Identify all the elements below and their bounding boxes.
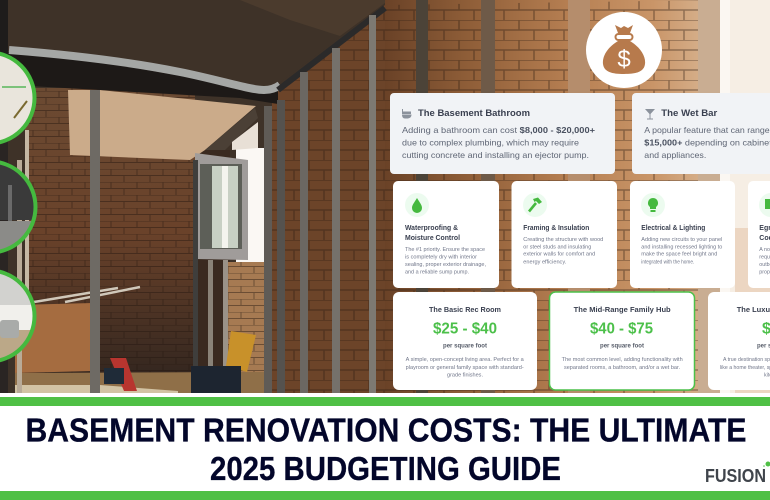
window opening and frame bbox=[195, 108, 272, 262]
heading: electrical and lighting: Electrical & Lighting bbox=[641, 225, 705, 232]
heading: framing and insulation: Framing & Insulation bbox=[523, 225, 589, 232]
title bbox=[26, 413, 746, 488]
text: luxury description bbox=[720, 357, 770, 379]
title: 2025 BUDGETING GUIDE bbox=[210, 451, 561, 488]
heading: the basement bathroom: The Basement Bathroom bbox=[418, 108, 530, 119]
panel: framing and insulation bbox=[512, 181, 617, 288]
text: bathroom description: Adding a bathroom can cost $8,000 - $20,000+ bbox=[402, 125, 595, 135]
unit: basic: per square foot bbox=[443, 343, 487, 349]
photo circle: blueprints bbox=[0, 52, 36, 144]
panel: the luxury basement bbox=[708, 292, 770, 390]
price: mid-range: $40 - $75 bbox=[590, 320, 653, 338]
text: wet bar description: and appliances. bbox=[644, 150, 706, 160]
text: egress description bbox=[759, 247, 770, 276]
back room wall bbox=[25, 88, 266, 393]
text: framing description bbox=[523, 237, 603, 265]
text: basic description: A simple, open-concept living area. Perfect for a bbox=[406, 357, 524, 363]
panel: the basic rec room bbox=[393, 292, 537, 390]
heading: waterproofing: Moisture Control bbox=[405, 235, 460, 242]
text: framing description: Creating the structure with wood bbox=[523, 237, 603, 243]
text: basic description bbox=[406, 357, 524, 379]
text: bathroom description bbox=[402, 125, 595, 160]
title band bbox=[0, 393, 770, 500]
text: electrical description: integrated with the home. bbox=[641, 259, 694, 265]
plywood sheet bbox=[15, 303, 93, 373]
icon: bathtub bbox=[402, 109, 412, 118]
heading: mid-range: The Mid-Range Family Hub bbox=[574, 305, 671, 314]
price: basic: $25 - $40 bbox=[433, 320, 497, 338]
panel: the wet bar bbox=[632, 93, 770, 174]
text: basic description: grade finishes. bbox=[447, 373, 483, 379]
text: framing description: or steel studs and insulating bbox=[523, 245, 591, 251]
panel: waterproofing and moisture control bbox=[393, 181, 499, 288]
text: mid-range description bbox=[562, 357, 683, 371]
text: waterproofing description: and a reliable sump pump. bbox=[405, 270, 469, 276]
text: electrical description: and installing recessed lighting to bbox=[641, 245, 722, 251]
photo circle: finished basement bbox=[0, 270, 36, 362]
toolbox bbox=[191, 366, 241, 393]
text: bathroom description: due to complex plumbing, which may require bbox=[402, 138, 579, 148]
background photo: basement under renovation bbox=[0, 0, 770, 393]
heading: egress bbox=[759, 225, 770, 242]
text: wet bar description bbox=[644, 125, 770, 160]
text: basic description: playroom or general family space with standard- bbox=[406, 365, 524, 371]
icon: money bag: $ bbox=[617, 46, 631, 73]
panel: electrical and lighting bbox=[630, 181, 735, 288]
photo circle: unfinished basement bbox=[0, 160, 38, 254]
text: waterproofing description bbox=[405, 247, 486, 276]
icon: light bulb bbox=[641, 193, 665, 217]
back room ceiling bbox=[68, 90, 256, 160]
metal studs bbox=[0, 0, 720, 393]
heading: waterproofing bbox=[405, 225, 460, 242]
text: electrical description bbox=[641, 237, 722, 265]
floor bbox=[15, 372, 266, 393]
text: mid-range description: separated rooms, a bathroom, and/or a wet bar. bbox=[564, 365, 680, 371]
corner wall track bbox=[278, 8, 385, 90]
panel: the basement bathroom bbox=[390, 93, 615, 174]
text: framing description: exterior walls for comfort and bbox=[523, 252, 595, 258]
panel: egress windows bbox=[748, 181, 770, 288]
text: electrical description: make the space feel bright and bbox=[641, 252, 717, 258]
text: bathroom description: cutting concrete and installing an ejector pump. bbox=[402, 150, 589, 160]
unit: mid-range: per square foot bbox=[600, 343, 644, 349]
text: wet bar description: $15,000+ depending on cabinetry bbox=[644, 138, 770, 148]
red tool bbox=[104, 358, 137, 391]
panel: the mid-range family hub bbox=[550, 292, 694, 390]
icon: cocktail glass bbox=[645, 109, 655, 120]
icon: hammer bbox=[523, 193, 547, 217]
icon: egress bbox=[759, 193, 770, 217]
text: framing description: energy efficiency. bbox=[523, 259, 566, 265]
text: electrical description: Adding new circuits to your panel bbox=[641, 237, 722, 243]
icon: money bag bbox=[586, 12, 662, 88]
text: waterproofing description: sealing, proper exterior drainage, bbox=[405, 262, 486, 268]
icon: water drop bbox=[405, 193, 429, 217]
main ceiling bbox=[0, 0, 385, 92]
yellow case bbox=[226, 331, 256, 372]
white pipes bbox=[9, 50, 280, 90]
text: mid-range description: The most common level, adding functionality with bbox=[562, 357, 683, 363]
text: waterproofing description: The #1 priority. Ensure the space bbox=[405, 247, 485, 253]
wire conduit bbox=[34, 287, 140, 302]
heading: basic rec room: The Basic Rec Room bbox=[429, 305, 501, 314]
right brick wall bbox=[272, 0, 770, 393]
heading: waterproofing: Waterproofing & bbox=[405, 225, 458, 232]
text: waterproofing description: is completely dry with interior bbox=[405, 254, 477, 260]
heading: the wet bar: The Wet Bar bbox=[661, 108, 718, 119]
ceiling beam bbox=[8, 52, 278, 104]
